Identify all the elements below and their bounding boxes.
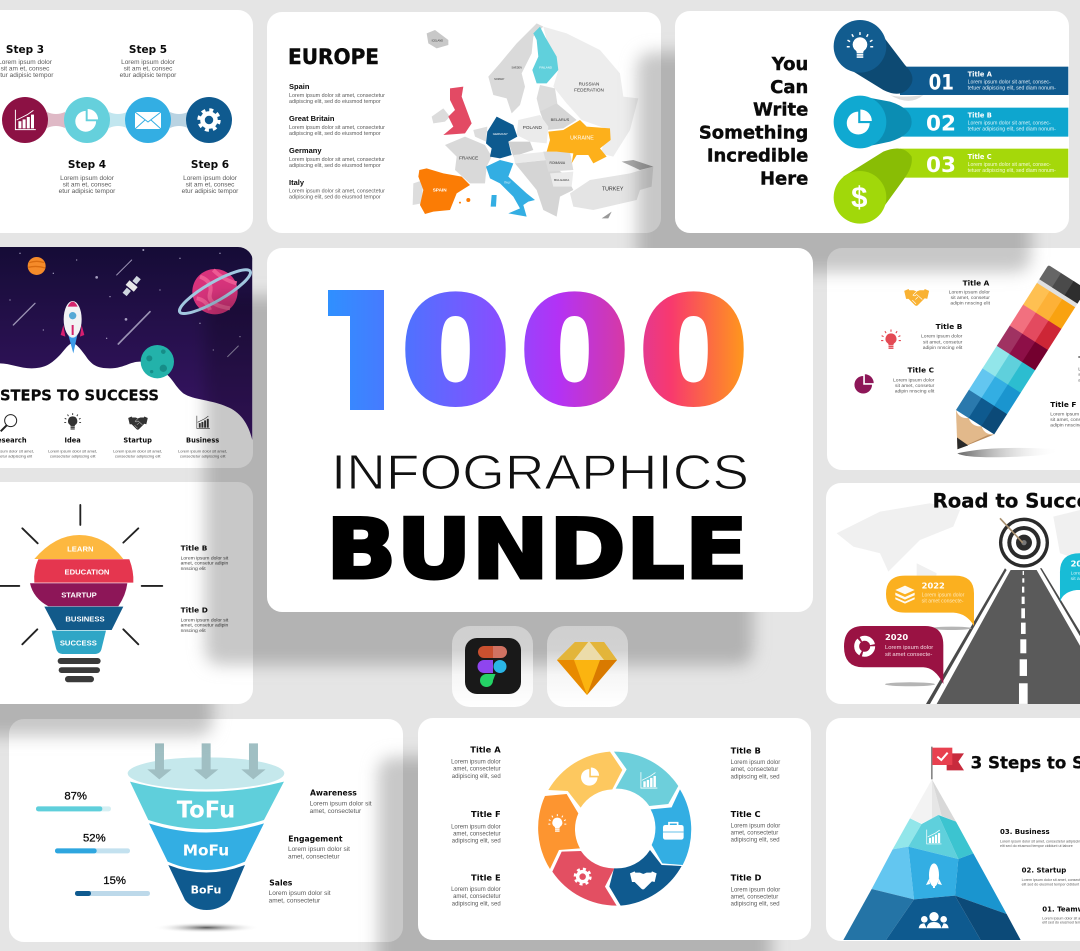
- layer: business: BUSINESS: [65, 614, 105, 623]
- icon: pie: [854, 374, 874, 394]
- ribbon 01: 01: [929, 70, 954, 95]
- planet: teal moon: [141, 345, 174, 378]
- text: sales: amet, consectetur: [269, 898, 321, 905]
- stars: [9, 249, 241, 351]
- text: title D: [731, 873, 780, 908]
- bubble: teal: [1060, 553, 1080, 602]
- bubble: 2020: sit amet consecte-: [885, 652, 932, 658]
- layer: success: [52, 631, 106, 654]
- mountain teal layer: [893, 815, 973, 859]
- text: step 6: etur adipisic tempor: [182, 188, 239, 195]
- map labels: TURKEY: [602, 186, 624, 192]
- text: step 3: [0, 44, 54, 79]
- planet: orange: [28, 257, 46, 275]
- text: step 4: [59, 159, 116, 195]
- heading: infographics: INFOGRAPHICS: [331, 446, 749, 500]
- text: engagement: [288, 835, 350, 861]
- text: title B: amet, consetur adipin: [181, 561, 229, 567]
- icon: team: [919, 912, 949, 928]
- ribbon 02: 02: [926, 112, 956, 137]
- list: countries: Lorem ipsum dolor sit amet, consectetur: [289, 125, 385, 131]
- Germany: [486, 117, 517, 158]
- text: title F: Title F: [471, 809, 501, 819]
- text: step 4: Lorem ipsum dolor: [60, 175, 115, 182]
- Italy: [486, 160, 535, 217]
- text: title D: amet, consectetur: [731, 895, 778, 901]
- number: 1000: [318, 255, 748, 445]
- layer: learn: LEARN: [67, 544, 94, 553]
- bar: 15%: [75, 875, 150, 896]
- list: countries: Italy: [289, 178, 305, 187]
- text: title D: nnscing elit: [181, 628, 206, 634]
- step: startup: consectetur adipiscing elit: [115, 454, 161, 459]
- map labels: UKRAINE: [570, 135, 594, 141]
- text: title D: Title D: [731, 873, 762, 883]
- text: title B: adipin nnscing elit: [923, 345, 963, 351]
- map of Europe: [413, 23, 653, 218]
- text: title E: amet, consectetur: [453, 894, 501, 900]
- world map background: [837, 504, 1080, 576]
- text: title F: Lorem ipsum dolor: [451, 824, 501, 830]
- text: step 4: sit am et, consec: [63, 182, 112, 188]
- comets: [13, 260, 238, 357]
- connectors between circles: [47, 112, 188, 128]
- bar: 87%: 87%: [64, 790, 87, 802]
- text: 02 startup: 02. Startup: [1022, 867, 1066, 875]
- ribbon 02: Title B: [968, 112, 992, 120]
- layer: learn: [34, 535, 123, 559]
- text: title D: Title D: [181, 606, 208, 615]
- icon: chart circle: [2, 97, 48, 143]
- text: step 5: etur adipisic tempor: [120, 72, 177, 79]
- text: step 6: sit am et, consec: [186, 182, 235, 188]
- heading: you can write something: Incredible: [707, 145, 808, 166]
- text: title C: sit amet, consetur: [895, 383, 935, 389]
- text: title B: Lorem ipsum dolor sit: [181, 555, 229, 561]
- planet: saturn: [178, 268, 252, 315]
- stage: ToFu: [130, 782, 284, 829]
- text: step 5: [120, 44, 177, 79]
- pencil shadow: [958, 448, 1036, 458]
- text: awareness: Awareness: [310, 789, 357, 798]
- text: step 5: sit am et, consec: [124, 66, 173, 72]
- text: step 6: Step 6: [191, 159, 229, 171]
- text: 03 business: 03. Business: [1000, 828, 1050, 836]
- text: title C: [731, 809, 780, 844]
- segment: pie yellow: [548, 752, 622, 808]
- step: startup: Startup: [123, 437, 152, 445]
- text: step 4: Step 4: [68, 159, 106, 171]
- panel: circular diagram: [418, 718, 811, 940]
- text: title C: Title C: [908, 366, 934, 375]
- number: 1000: 0: [401, 268, 510, 437]
- map labels: FINLAND: [539, 65, 553, 69]
- segment: handshake navy: [609, 850, 682, 906]
- text: step 6: Lorem ipsum dolor: [183, 175, 238, 182]
- flag: [931, 747, 964, 779]
- map labels: BULGARIA: [554, 178, 569, 182]
- text: title C: adipiscing elit, sed: [731, 838, 780, 844]
- ribbon 02: Lorem ipsum dolor sit amet, consec-: [968, 121, 1051, 127]
- stage: MoFu: [149, 823, 264, 870]
- layer: startup: STARTUP: [61, 590, 97, 599]
- text: title B: adipiscing elit, sed: [731, 774, 780, 780]
- ribbon 01: Title A: [968, 70, 993, 78]
- list: countries: adipiscing elit, sed do eiusmod tempor: [289, 99, 381, 105]
- text: title A: adipiscing elit, sed: [452, 774, 501, 780]
- ribbon 02: [834, 96, 1068, 148]
- stage: BoFu: BoFu: [191, 883, 221, 896]
- map labels: SWEDEN: [512, 68, 522, 70]
- list: countries: Germany: [289, 146, 322, 155]
- text: title B: nnscing elit: [181, 566, 206, 572]
- step: startup: Lorem ipsum dolor sit amet,: [113, 449, 162, 454]
- panel: light bulb: [0, 482, 253, 704]
- text: title A: Title A: [470, 745, 501, 755]
- text: step 6: [182, 159, 239, 195]
- list: countries: adipiscing elit, sed do eiusmod tempor: [289, 163, 381, 169]
- text: title D: Lorem ipsum dolor sit: [181, 617, 229, 623]
- stage: MoFu: MoFu: [183, 841, 229, 859]
- step: business: consectetur adipiscing elit: [180, 454, 226, 459]
- list: countries: [289, 82, 385, 200]
- text: title E: [451, 873, 501, 907]
- text: title B: Title B: [731, 745, 761, 755]
- ribbon 01: [834, 20, 1068, 101]
- rays: [0, 505, 162, 644]
- step: idea: Lorem ipsum dolor sit amet,: [48, 449, 97, 454]
- Ukraine: [547, 120, 611, 163]
- mountain snow: [910, 779, 956, 823]
- map labels: FRANCE: [459, 156, 478, 161]
- panel: steps timeline: [0, 10, 253, 233]
- text: title F: [1050, 400, 1080, 429]
- text: 03 business: elit sed do eiusmod tempor cididunt ut labore: [1000, 844, 1073, 848]
- heading: you can write something: Something: [699, 123, 808, 144]
- bulb base: [58, 658, 101, 682]
- stage: ToFu: ToFu: [177, 798, 235, 824]
- panel: funnel: [9, 719, 403, 942]
- pencil wood tip: [956, 410, 994, 450]
- text: sales: [269, 879, 331, 905]
- heading: you can write something: Here: [760, 168, 808, 189]
- heading: you can write something: Write: [753, 100, 808, 121]
- text: title E: adipiscing elit, sed: [452, 901, 501, 907]
- ribbon 03: tetuer adipiscing elit, sed diam nonum-: [968, 168, 1056, 174]
- panel: You Can Write: [675, 11, 1069, 233]
- Spain: [418, 168, 470, 214]
- map labels: ROMANIA: [550, 161, 566, 165]
- text: title D: Lorem ipsum dolor: [731, 888, 780, 894]
- segment: bulb orange: [538, 794, 580, 869]
- text: 03 business: [1000, 828, 1080, 848]
- icon: mail circle: [125, 97, 171, 143]
- target: [999, 518, 1049, 568]
- text: title B: sit amet, consetur: [923, 339, 963, 345]
- text: title F: Title F: [1050, 400, 1076, 409]
- text: title B: [921, 322, 963, 351]
- panel: Europe map: [267, 12, 661, 233]
- text: title A: [451, 745, 501, 780]
- map labels: SPAIN: [433, 187, 447, 192]
- ribbon 03: [834, 148, 1068, 224]
- text: sales: Sales: [269, 879, 293, 888]
- bar: 15%: 15%: [103, 875, 126, 887]
- segment: chart teal: [614, 752, 678, 806]
- text: title D: [181, 606, 229, 634]
- bubble: 2022: 2022: [922, 580, 945, 590]
- text: step 3: Step 3: [6, 44, 44, 56]
- text: sales: Lorem ipsum dolor sit: [269, 890, 331, 897]
- road: [926, 568, 1080, 704]
- panel: space steps to success: [0, 247, 255, 468]
- text: title A: [949, 280, 990, 306]
- heading: you can write something: [699, 54, 808, 189]
- text: title F: amet, consectetur: [453, 831, 501, 837]
- icon: pie circle: [64, 97, 110, 143]
- icon: bulb: [881, 330, 901, 349]
- list: countries: Great Britain: [289, 114, 335, 123]
- ribbon 03: $: [851, 181, 867, 214]
- stage: BoFu: [168, 865, 245, 910]
- panel: pyramid: [826, 718, 1080, 941]
- text: title B: [731, 745, 780, 780]
- bubble: 2022: Lorem ipsum dolor: [922, 593, 965, 599]
- layer: business: [44, 607, 123, 630]
- step: startup: [113, 416, 162, 459]
- step: business: [178, 416, 227, 459]
- step: idea: consectetur adipiscing elit: [50, 454, 96, 459]
- text: awareness: Lorem ipsum dolor sit: [310, 800, 372, 807]
- segment: briefcase blue: [651, 789, 691, 865]
- text: title E: Title E: [471, 873, 501, 883]
- bar: 52%: 52%: [83, 832, 106, 844]
- heading: you can write something: Can: [770, 77, 808, 98]
- text: awareness: [310, 789, 372, 815]
- text: title F: adipiscing elit, sed: [452, 839, 501, 845]
- ribbon 01: Lorem ipsum dolor sit amet, consec-: [968, 79, 1051, 85]
- list: countries: Lorem ipsum dolor sit amet, consectetur: [289, 93, 385, 99]
- satellite: [122, 276, 141, 296]
- mountain navy layer: [843, 889, 1021, 940]
- layer: education: [34, 559, 133, 583]
- text: title B: [181, 544, 229, 572]
- text: title B: Lorem ipsum dolor: [921, 334, 963, 340]
- list: countries: Lorem ipsum dolor sit amet, consectetur: [289, 188, 385, 194]
- text: title A: Lorem ipsum dolor: [949, 289, 990, 295]
- text: title C: amet, consectetur: [731, 830, 778, 836]
- step: business: Lorem ipsum dolor sit amet,: [178, 449, 227, 454]
- bubble: 2022: [886, 576, 974, 630]
- bubble: 2020: 2020: [885, 632, 908, 642]
- text: title E: Lorem ipsum dolor: [451, 887, 501, 893]
- map labels: BELARUS: [551, 117, 570, 122]
- text: 03 business: Lorem ipsum dolor sit amet, consectetur adipiscing: [1000, 840, 1080, 844]
- panel: road to success: [826, 483, 1080, 704]
- bubble: 2020: [844, 626, 943, 686]
- list: countries: Spain: [289, 82, 310, 91]
- icon: handshake: [904, 289, 929, 306]
- ribbon 02: tetuer adipiscing elit, sed diam nonum-: [968, 127, 1056, 133]
- map labels: NORWAY: [494, 78, 505, 81]
- Finland: [532, 27, 558, 83]
- bubble: 2020: Lorem ipsum dolor: [885, 645, 933, 651]
- step: idea: [48, 413, 97, 459]
- text: 02 startup: [1022, 867, 1080, 886]
- map labels: ITALY: [504, 180, 511, 184]
- map labels: RUSSIAN: [579, 82, 599, 87]
- icon: Sketch tile: [547, 626, 628, 707]
- text: title D: adipiscing elit, sed: [731, 902, 780, 908]
- step: idea: Idea: [65, 437, 81, 445]
- map labels: GERMANY: [493, 132, 508, 136]
- panel: main title: [267, 248, 813, 612]
- text: title B: Title B: [181, 544, 208, 553]
- arrows: [147, 743, 266, 779]
- text: title A: adipin nnscing elit: [950, 301, 991, 307]
- list: countries: adipiscing elit, sed do eiusmod tempor: [289, 194, 381, 200]
- text: engagement: Engagement: [288, 835, 343, 844]
- text: title C: [893, 366, 935, 395]
- map labels: ICELAND: [432, 38, 443, 42]
- text: title B: Lorem ipsum dolor: [731, 760, 780, 766]
- ribbon 03: 03: [926, 153, 956, 178]
- number: 1000: 0: [639, 268, 748, 437]
- ribbon 03: Lorem ipsum dolor sit amet, consec-: [968, 162, 1051, 168]
- text: title F: [451, 809, 501, 845]
- text: step 5: Step 5: [129, 44, 167, 56]
- funnel rim: [128, 757, 284, 789]
- text: step 3: sit am et, consec: [1, 66, 50, 72]
- text: title C: Lorem ipsum dolor: [731, 823, 780, 829]
- text: engagement: Lorem ipsum dolor sit: [288, 846, 350, 853]
- text: title D: amet, consetur adipin: [181, 623, 229, 629]
- panel: pencil: [827, 248, 1080, 470]
- icon: gear circle: [186, 97, 232, 143]
- text: engagement: amet, consectetur: [288, 854, 340, 861]
- text: title C: Lorem ipsum dolor: [893, 377, 935, 383]
- ribbon 03: Title C: [968, 153, 992, 161]
- title: Europe: EUROPE: [288, 45, 379, 69]
- rocket: [61, 301, 84, 353]
- map labels: POLAND: [523, 125, 543, 130]
- bar: 52%: [55, 832, 130, 853]
- number: 1000: 0: [520, 268, 629, 437]
- text: title B: amet, consectetur: [731, 767, 778, 773]
- heading: bundle: BUNDLE: [326, 501, 748, 598]
- text: title C: Title C: [731, 809, 761, 819]
- list: countries: adipiscing elit, sed do eiusmod tempor: [289, 131, 381, 137]
- number: 1000: 1: [318, 255, 398, 445]
- mountain blue layer: [872, 847, 1007, 914]
- list: countries: Lorem ipsum dolor sit amet, consectetur: [289, 157, 385, 163]
- heading: you can write something: You: [771, 54, 808, 75]
- text: title A: Title A: [963, 278, 990, 287]
- bubble: 2022: sit amet consecte-: [922, 599, 964, 605]
- text: title A: Lorem ipsum dolor: [451, 760, 501, 766]
- map labels: [432, 38, 624, 192]
- heading: steps to success: STEPS TO SUCCESS: [0, 387, 159, 404]
- pencil: [956, 266, 1080, 450]
- ribbon 01: tetuer adipiscing elit, sed diam nonum-: [968, 85, 1056, 91]
- shadow of the main card: [205, 296, 753, 665]
- segment: gear red: [552, 851, 617, 906]
- text: title E partially cropped: [1078, 355, 1080, 384]
- icon: rocket: [926, 863, 942, 888]
- step: business: Business: [186, 437, 219, 445]
- text: step 5: Lorem ipsum dolor: [121, 59, 176, 66]
- bar: 87%: [36, 790, 111, 811]
- layer: education: EDUCATION: [65, 568, 110, 577]
- Great Britain: [443, 87, 472, 135]
- map labels: FEDERATION: [574, 88, 604, 93]
- step: research: [0, 415, 34, 459]
- text: title B: Title B: [936, 322, 963, 331]
- text: awareness: amet, consectetur: [310, 808, 362, 815]
- layer: startup: [30, 583, 127, 606]
- text: step 4: etur adipisic tempor: [59, 188, 116, 195]
- funnel shadow: [153, 922, 260, 933]
- text: title C: adipin nnscing elit: [895, 389, 935, 395]
- layer: success: SUCCESS: [60, 638, 97, 647]
- text: title A: amet, consectetur: [453, 767, 501, 773]
- text: title A: sit amet, consetur: [951, 295, 990, 301]
- text: 01 teamwork: [1042, 905, 1080, 925]
- space sky: [0, 247, 252, 440]
- icon: Figma tile: [452, 626, 533, 707]
